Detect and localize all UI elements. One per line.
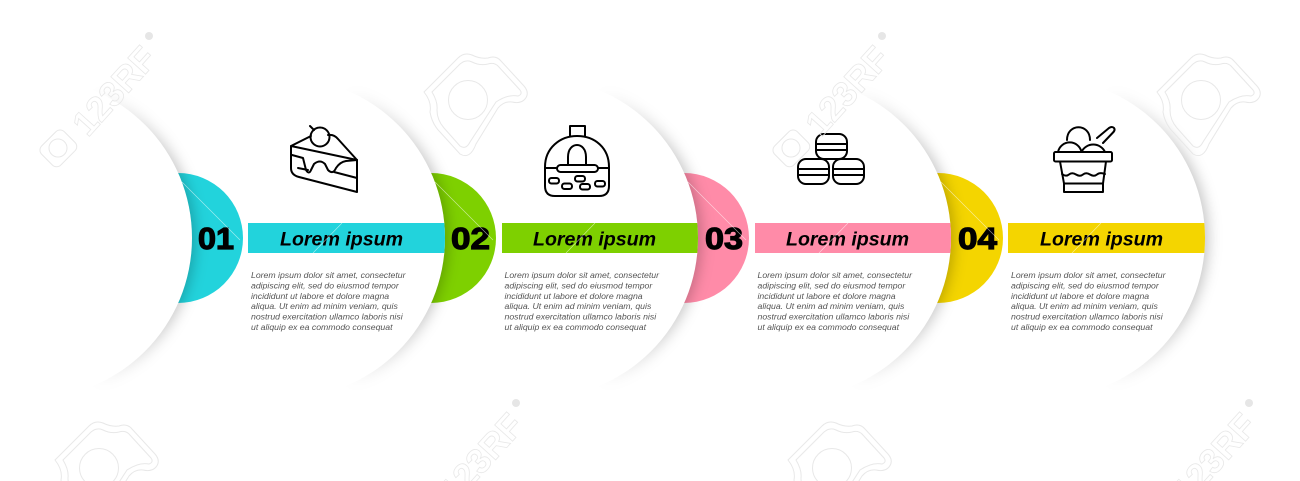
text block 03: incididunt ut labore et dolore magna	[758, 291, 896, 301]
white disc 5	[885, 78, 1205, 398]
text block 03	[758, 270, 913, 332]
panel: step 03	[755, 134, 951, 332]
number 02: 02	[451, 221, 490, 256]
text block 02: Lorem ipsum dolor sit amet, consectetur	[504, 270, 660, 280]
icon: cake slice	[291, 126, 357, 192]
text block 02: nostrud exercitation ullamco laboris nisi	[504, 312, 657, 322]
text block 03: ut aliquip ex ea commodo consequat	[758, 322, 900, 332]
color disc pink	[619, 173, 749, 303]
color disc green	[366, 173, 496, 303]
panel: step 02	[502, 126, 698, 332]
title bar 01	[248, 223, 445, 253]
watermark: egg bottom 2	[788, 422, 891, 481]
heading 03: Lorem ipsum	[786, 228, 909, 250]
text block 04: nostrud exercitation ullamco laboris nisi	[1011, 312, 1164, 322]
disc shadow 5	[892, 80, 1208, 396]
text block 03: Lorem ipsum dolor sit amet, consectetur	[758, 270, 913, 280]
watermark: egg top 1	[424, 54, 527, 156]
watermark: egg bottom 1	[55, 422, 158, 481]
disc shadow 4	[638, 80, 954, 396]
text block 04: ut aliquip ex ea commodo consequat	[1011, 322, 1153, 332]
watermark: egg top 2	[1157, 54, 1260, 156]
text block 04: aliqua. Ut enim ad minim veniam, quis	[1011, 301, 1158, 311]
watermark: 123RF top 1	[37, 32, 164, 169]
text block 04: incididunt ut labore et dolore magna	[1011, 291, 1149, 301]
text block 03: nostrud exercitation ullamco laboris nisi	[758, 312, 910, 322]
number 01: 01	[198, 221, 234, 256]
title bar 03	[755, 223, 951, 253]
color disc yellow	[873, 173, 1003, 303]
panel: step 01	[248, 126, 445, 332]
text block 01: Lorem ipsum dolor sit amet, consectetur	[251, 270, 407, 280]
panel: step 04 number disc	[631, 78, 1003, 398]
text block 01: ut aliquip ex ea commodo consequat	[251, 322, 393, 332]
icon: brick oven	[545, 126, 609, 196]
number 03: 03	[705, 221, 743, 256]
watermark: 123RF top 2	[770, 32, 897, 169]
text block 02: adipiscing elit, sed do eiusmod tempor	[504, 280, 653, 290]
text block 01: aliqua. Ut enim ad minim veniam, quis	[251, 301, 398, 311]
title bar 04	[1008, 223, 1205, 253]
text block 01: incididunt ut labore et dolore magna	[251, 291, 389, 301]
disc shadow 1	[0, 80, 195, 396]
text block 02: incididunt ut labore et dolore magna	[504, 291, 643, 301]
text block 04: adipiscing elit, sed do eiusmod tempor	[1011, 280, 1160, 290]
heading 02: Lorem ipsum	[533, 228, 656, 250]
text block 01: nostrud exercitation ullamco laboris nisi	[251, 312, 404, 322]
text block 03: aliqua. Ut enim ad minim veniam, quis	[758, 301, 905, 311]
panel: step 04	[885, 78, 1208, 398]
text block 03: adipiscing elit, sed do eiusmod tempor	[758, 280, 906, 290]
text block 01	[251, 270, 407, 332]
white disc 4	[631, 78, 951, 398]
text block 02	[504, 270, 660, 332]
white disc 2	[125, 78, 445, 398]
text block 02: ut aliquip ex ea commodo consequat	[504, 322, 647, 332]
text block 04: Lorem ipsum dolor sit amet, consectetur	[1011, 270, 1167, 280]
text block 02: aliqua. Ut enim ad minim veniam, quis	[504, 301, 652, 311]
heading 01: Lorem ipsum	[280, 228, 403, 250]
disc shadow 2	[132, 80, 448, 396]
watermark: 123RF top 1: 123RF	[65, 39, 164, 143]
icon: macarons	[798, 134, 864, 184]
white hairlines of watermark	[182, 182, 1101, 253]
white disc 1	[0, 78, 192, 398]
white disc 3	[378, 78, 698, 398]
panel: step 01 number disc	[0, 78, 243, 398]
color disc teal	[113, 173, 243, 303]
text block 01: adipiscing elit, sed do eiusmod tempor	[251, 280, 400, 290]
heading 04: Lorem ipsum	[1040, 228, 1163, 250]
icon: ice cream cup	[1054, 127, 1115, 192]
text block 04	[1011, 270, 1167, 332]
disc shadow 3	[385, 80, 701, 396]
watermark: 123RF top 2: 123RF	[798, 39, 897, 143]
panel: step 02 number disc	[125, 78, 496, 398]
title bar 02	[502, 223, 698, 253]
number 04: 04	[958, 221, 998, 256]
panel: step 03 number disc	[378, 78, 749, 398]
